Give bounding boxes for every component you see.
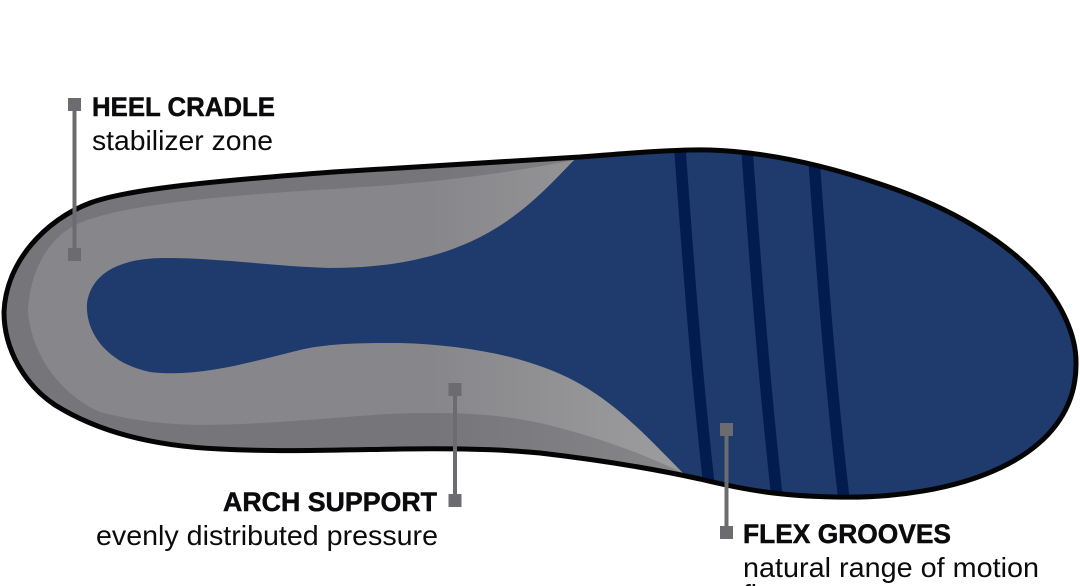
callout: heel cradle	[68, 92, 275, 261]
text: evenly distributed pressure: evenly distributed pressure	[96, 520, 438, 551]
leader line: heel cradle	[68, 98, 81, 261]
text: natural range of motion: natural range of motion	[743, 552, 1039, 583]
insole outer rim	[4, 150, 1076, 497]
heading: heel cradle: HEEL CRADLE	[92, 92, 275, 122]
insole	[4, 130, 1080, 520]
inner gray cushion	[28, 158, 700, 480]
blue forefoot and center	[86, 152, 1074, 495]
text: stabilizer zone: stabilizer zone	[92, 125, 273, 156]
callout: flex grooves	[720, 423, 1039, 586]
heading: arch support: ARCH SUPPORT	[223, 487, 438, 517]
heading: flex grooves: FLEX GROOVES	[743, 519, 951, 549]
leader line: flex grooves	[720, 423, 733, 539]
leader line: arch support	[448, 383, 462, 507]
callout: arch support	[96, 383, 462, 551]
flex grooves	[680, 150, 844, 500]
insole outline	[4, 150, 1076, 497]
